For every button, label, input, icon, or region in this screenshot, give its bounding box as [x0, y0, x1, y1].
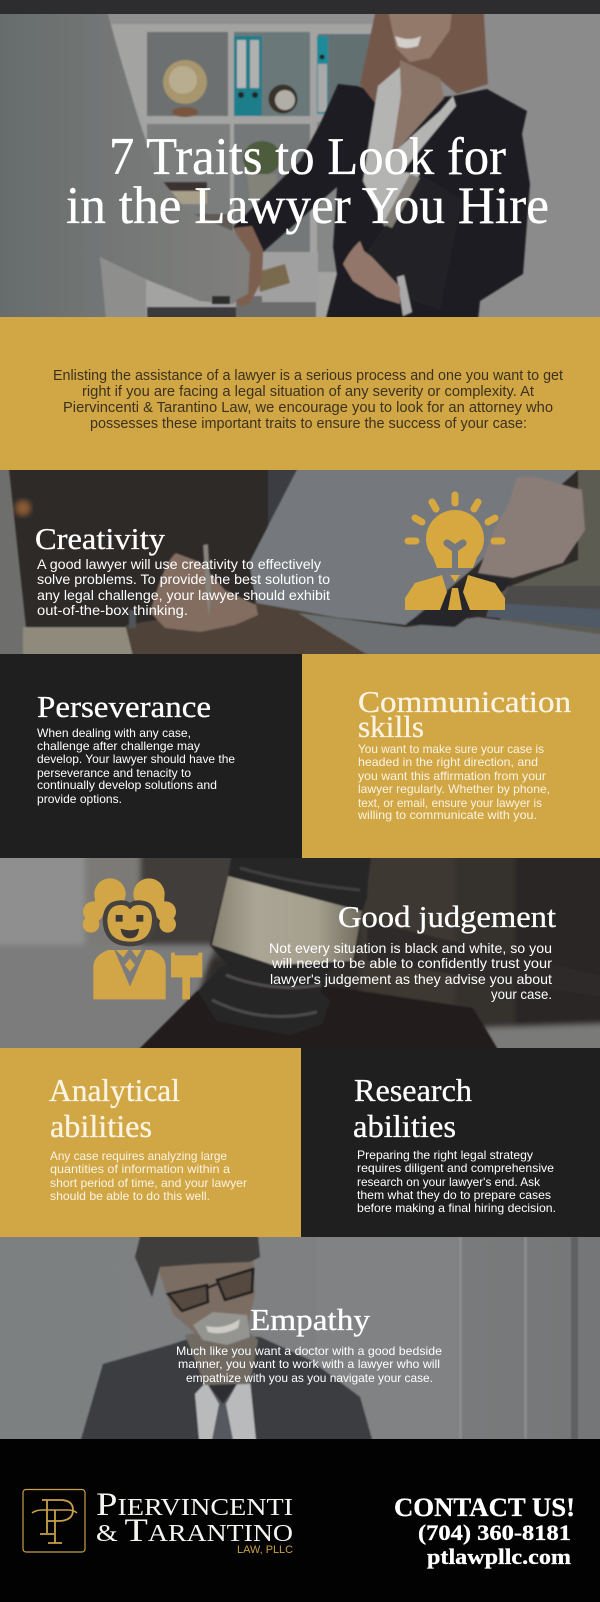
perseverance heading: Perseverance: [37, 689, 211, 724]
beard: [193, 1312, 250, 1345]
analytical heading: abilities: [50, 1108, 152, 1144]
creativity heading: Creativity: [35, 521, 166, 556]
empathy text: [176, 1344, 442, 1385]
contact details: CONTACT US!: [394, 1493, 575, 1522]
analytical text: should be able to do this well.: [50, 1189, 210, 1203]
gavel: [171, 953, 202, 999]
analytical heading: Analytical: [49, 1072, 180, 1108]
research text: before making a final hiring decision.: [357, 1201, 556, 1215]
man's suit: [0, 0, 250, 330]
icon: judge with gavel: [83, 878, 202, 999]
lower paper and folder: [298, 612, 600, 654]
research heading: Research: [354, 1072, 472, 1108]
title: in the Lawyer You Hire: [66, 177, 549, 235]
communication text: text, or email, ensure your lawyer is: [358, 796, 542, 810]
handle: [367, 922, 511, 982]
face: [158, 1260, 256, 1335]
logo: [23, 1487, 293, 1556]
analytical text: short period of time, and your lawyer: [50, 1176, 247, 1190]
panel: communication skills: [302, 654, 600, 858]
research text: them what they do to prepare cases: [357, 1188, 551, 1202]
title: [66, 128, 549, 235]
shirt: [194, 1382, 257, 1439]
research text: requires diligent and comprehensive: [357, 1161, 554, 1175]
hair: [360, 14, 489, 103]
hero photo: handshake in office: [0, 0, 600, 330]
communication text: headed in the right direction, and: [358, 755, 538, 769]
top bar: [0, 0, 600, 14]
logo name: PIERVINCENTI: [96, 1487, 293, 1523]
suit: [80, 1336, 372, 1439]
title: 7 Traits to Look for: [109, 128, 506, 186]
hair: [134, 1237, 261, 1297]
logo name: [96, 1487, 293, 1549]
judgement text: Not every situation is black and white, so you: [269, 940, 552, 956]
creativity text: any legal challenge, your lawyer should exhibit: [37, 587, 330, 603]
creativity text: out-of-the-box thinking.: [37, 602, 188, 618]
panel: footer: [0, 1439, 600, 1602]
panel: hero photo and title: [0, 0, 600, 330]
intro text: [53, 367, 564, 432]
logo name: & TARANTINO: [96, 1513, 293, 1549]
panel: good judgement: [0, 858, 600, 1048]
clock: [268, 84, 298, 114]
communication heading: Communication: [358, 684, 572, 719]
panel: empathy: [0, 1237, 600, 1439]
communication text: lawyer regularly. Whether by phone,: [358, 782, 550, 796]
robe: [93, 950, 166, 999]
perseverance text: [37, 726, 235, 806]
panel: perseverance: [0, 654, 302, 858]
empathy photo: smiling lawyer: [0, 1237, 600, 1439]
disc: [139, 986, 498, 1048]
judgement text: will need to be able to confidently trust your: [271, 955, 552, 971]
judgement text: your case.: [491, 986, 552, 1002]
icon: light bulb person: [405, 495, 505, 610]
research heading: [353, 1072, 472, 1144]
panel: research abilities: [301, 1048, 600, 1237]
panel: introduction: [0, 317, 600, 470]
binders: [234, 36, 262, 116]
perseverance text: provide options.: [37, 792, 122, 806]
panel: creativity: [0, 460, 600, 664]
globe: [163, 60, 207, 104]
gavel head: [198, 850, 372, 1035]
perseverance text: challenge after challenge may: [37, 739, 200, 753]
research text: research on your lawyer's end. Ask: [357, 1175, 541, 1189]
plant and pot: [243, 141, 281, 175]
communication text: willing to communicate with you.: [357, 808, 537, 822]
neck: [185, 1333, 258, 1386]
creativity text: A good lawyer will use creativity to effectively: [37, 556, 321, 572]
creativity text: [37, 556, 330, 618]
analytical text: [50, 1149, 247, 1203]
communication text: you want this affirmation from your: [358, 769, 546, 783]
face: [105, 903, 154, 944]
contact details: ptlawpllc.com: [427, 1544, 571, 1569]
communication heading: [358, 684, 572, 744]
intro text: Piervincenti & Tarantino Law, we encourage you to look for an attorney who: [63, 399, 553, 416]
right background: [500, 460, 600, 664]
shirt: [363, 67, 456, 227]
panel: analytical abilities: [0, 1048, 301, 1237]
research text: Preparing the right legal strategy: [357, 1148, 533, 1162]
creativity text: solve problems. To provide the best solution to: [37, 571, 330, 587]
books: [163, 182, 207, 191]
analytical heading: [49, 1072, 180, 1144]
glasses: [168, 1285, 208, 1311]
sleeve: [406, 572, 513, 627]
table and notebook: [23, 627, 135, 664]
logo suffix: LAW, PLLC: [237, 1544, 293, 1556]
perseverance text: continually develop solutions and: [37, 778, 217, 792]
folder: [384, 224, 409, 290]
woman's hand: [343, 241, 400, 304]
cuff: [397, 275, 412, 316]
logo monogram: [23, 1490, 85, 1552]
judgement text: lawyer's judgement as they advise you about: [270, 971, 552, 987]
empathy text: manner, you want to work with a lawyer who will: [178, 1357, 440, 1371]
communication text: [357, 742, 550, 822]
perseverance text: When dealing with any case,: [37, 726, 191, 740]
perseverance text: perseverance and tenacity to: [37, 766, 191, 780]
intro text: right if you are facing a legal situation of any severity or complexity. At: [82, 383, 535, 400]
bookcase: [110, 24, 373, 317]
main paper: [249, 460, 582, 625]
contact details: (704) 360-8181: [418, 1520, 571, 1545]
empathy text: empathize with you as you navigate your case.: [186, 1371, 433, 1385]
woman's jacket: [233, 84, 530, 330]
creativity photo: lawyer signing papers: [0, 460, 600, 664]
contact details: [394, 1493, 575, 1569]
perseverance text: develop. Your lawyer should have the: [37, 752, 235, 766]
tie: [208, 1385, 236, 1439]
judgement text: [269, 940, 552, 1002]
analytical text: quantities of information within a: [50, 1162, 230, 1176]
analytical text: Any case requires analyzing large: [50, 1149, 227, 1163]
judgement photo: gavel: [0, 858, 600, 1048]
intro text: Enlisting the assistance of a lawyer is a serious process and one you want to get: [53, 367, 564, 384]
left hand and pen: [150, 553, 258, 632]
right hand: [478, 477, 585, 578]
handshake: [233, 226, 263, 307]
good judgement heading: Good judgement: [338, 899, 556, 934]
empathy text: Much like you want a doctor with a good bedside: [176, 1344, 442, 1358]
communication text: You want to make sure your case is: [358, 742, 544, 756]
research text: [357, 1148, 556, 1215]
face and chest: [388, 14, 452, 62]
research heading: abilities: [353, 1108, 456, 1144]
empathy heading: Empathy: [250, 1302, 371, 1337]
wig: [83, 878, 176, 933]
intro text: possesses these important traits to ensure the success of your case:: [90, 415, 527, 432]
communication heading: skills: [358, 709, 424, 744]
